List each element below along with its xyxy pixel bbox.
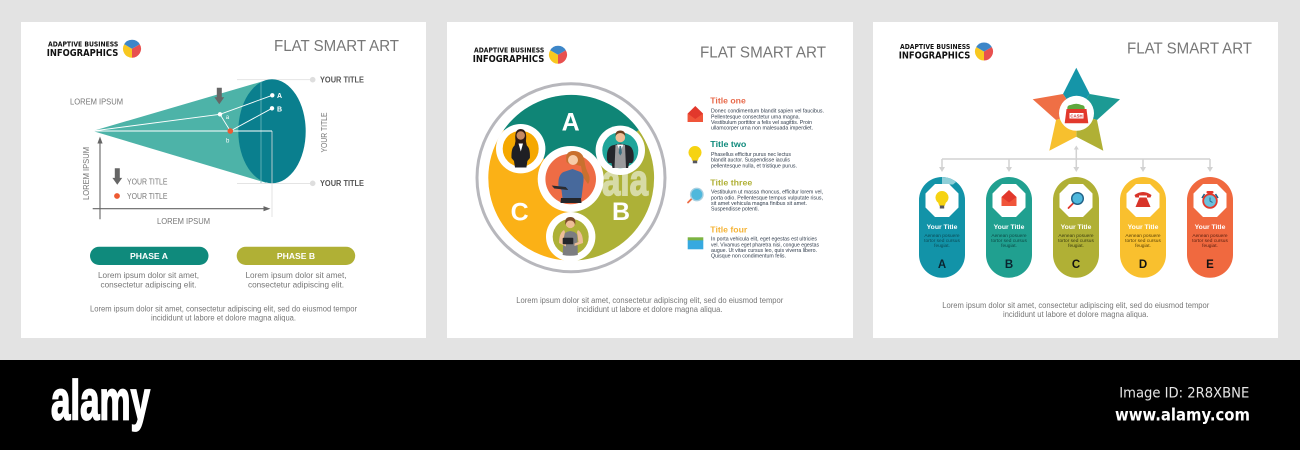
- website: www.alamy.com: [1115, 406, 1250, 425]
- icon: magnifier: [688, 188, 703, 202]
- legend: YOUR TITLE: [127, 191, 168, 201]
- phase B: [237, 247, 355, 289]
- icon: envelope: [1002, 190, 1016, 206]
- item: title three: porta odio. Pellentesque tempus vulputate risus,: [711, 195, 823, 201]
- panel: star hierarchy: [873, 22, 1278, 338]
- item: title two: [688, 139, 797, 169]
- person: bottom woman with tablet: [546, 212, 595, 261]
- footer text: incididunt ut labore et dolore magna aliqua.: [577, 305, 722, 314]
- card E: [1187, 177, 1233, 278]
- logo: INFOGRAPHICS: [899, 50, 970, 62]
- card B: tortor sed cursus: [991, 238, 1027, 244]
- card D: tortor sed cursus: [1125, 238, 1161, 244]
- item: title one: Pellentesque consectetur urna magna.: [711, 114, 800, 120]
- footer text: [942, 301, 1210, 319]
- item: title three: Suspendisse potenti.: [711, 206, 759, 212]
- item: title four: Title four: [710, 224, 748, 234]
- logo: [473, 46, 567, 65]
- circle chart: [477, 84, 665, 272]
- axis labels: YOUR TITLE: [319, 112, 329, 152]
- item: title one: ullamcorper urna non malesuada imperdiet.: [711, 125, 813, 131]
- heading: FLAT SMART ART: [700, 44, 826, 61]
- icon: alarm clock: [1202, 191, 1218, 208]
- logo: INFOGRAPHICS: [47, 48, 118, 59]
- side titles: [320, 75, 365, 188]
- item: title four: In porta vehicula elit, eget egestas est ultricies: [711, 237, 817, 243]
- item: title three: Vestibulum ut massa rhoncus, efficitur lorem vel,: [711, 190, 823, 196]
- icon: cash: CASH: [1070, 114, 1083, 118]
- logo: [47, 40, 141, 59]
- heading: FLAT SMART ART: [274, 38, 399, 55]
- footer text: Lorem ipsum dolor sit amet, consectetur adipiscing elit, sed do eiusmod tempor: [516, 296, 784, 305]
- card B: feugiat.: [1001, 243, 1017, 249]
- card A: [919, 177, 965, 278]
- phase B: PHASE B: [277, 251, 315, 261]
- item: title four: Quisque non condimentum felis.: [711, 254, 786, 260]
- footer text: incididunt ut labore et dolore magna aliqua.: [1003, 310, 1148, 319]
- phase B: consectetur adipiscing elit.: [248, 280, 344, 289]
- logo: ADAPTIVE BUSINESS: [48, 40, 118, 49]
- item: title one: Vestibulum porttitor a felis vel sagittis. Proin: [711, 120, 812, 126]
- circle chart: C: [511, 198, 529, 226]
- panel: circle diagram: [447, 22, 853, 338]
- item: title three: Title three: [710, 178, 753, 188]
- panel: cone chart: [21, 22, 426, 338]
- item: title four: augue. Ut vitae cursus leo, quis viverra libero.: [711, 248, 817, 254]
- image id: Image ID: 2R8XBNE: [1119, 385, 1249, 401]
- logo: INFOGRAPHICS: [473, 54, 544, 65]
- item: title four: [688, 224, 819, 260]
- phase B: Lorem ipsum dolor sit amet,: [245, 271, 347, 280]
- item: title two: Title two: [710, 139, 746, 149]
- legend: YOUR TITLE: [127, 176, 168, 186]
- card B: Your Title: [994, 224, 1025, 231]
- footer text: incididunt ut labore et dolore magna aliqua.: [151, 314, 296, 323]
- segment A: [504, 95, 639, 178]
- axis labels: LOREM IPSUM: [70, 97, 123, 107]
- footer text: [516, 296, 784, 314]
- card A: Aenean posuere: [924, 233, 960, 239]
- legend: [112, 168, 168, 201]
- card C: [1053, 177, 1099, 278]
- watermark ghost: ala: [602, 156, 648, 205]
- card E: feugiat.: [1202, 243, 1218, 249]
- side titles: YOUR TITLE: [320, 179, 365, 188]
- card B: B: [1005, 259, 1013, 271]
- side titles: YOUR TITLE: [320, 75, 365, 84]
- card A: Your Title: [927, 224, 958, 231]
- chart axes: [93, 136, 270, 219]
- person: woman in black suit: [496, 124, 545, 173]
- logo: ADAPTIVE BUSINESS: [474, 46, 544, 55]
- footer text: Lorem ipsum dolor sit amet, consectetur adipiscing elit, sed do eiusmod tempor: [90, 304, 357, 314]
- item: title three: sit amet vehicula magna finibus sit amet.: [711, 201, 807, 207]
- axis labels: [70, 97, 329, 226]
- card E: Aenean posuere: [1192, 233, 1228, 239]
- circle chart: A: [562, 108, 580, 136]
- card C: Aenean posuere: [1058, 233, 1094, 239]
- footer band: [0, 360, 1300, 450]
- card A: A: [938, 259, 946, 271]
- segment C: [488, 130, 571, 261]
- cone chart: B: [277, 106, 282, 114]
- logo: [899, 42, 993, 62]
- phase A: consectetur adipiscing elit.: [100, 280, 197, 289]
- item: title one: [688, 96, 824, 131]
- cone chart: [93, 79, 306, 217]
- card A: tortor sed cursus: [924, 238, 960, 244]
- icon: water: [688, 237, 703, 249]
- logo: ADAPTIVE BUSINESS: [900, 42, 970, 51]
- phase A: [90, 247, 208, 289]
- person: central woman: [538, 146, 604, 212]
- icon: telephone: [1134, 192, 1152, 207]
- card C: tortor sed cursus: [1058, 238, 1094, 244]
- heading: FLAT SMART ART: [1127, 40, 1252, 57]
- card C: feugiat.: [1068, 243, 1084, 249]
- phase A: Lorem ipsum dolor sit amet,: [98, 271, 199, 280]
- cone chart: b: [226, 138, 230, 144]
- card D: [1120, 177, 1166, 278]
- icon: envelope: [688, 106, 703, 122]
- axis labels: LOREM IPSUM: [157, 216, 210, 226]
- item: title two: pellentesque nulla, et tristique purus.: [711, 163, 797, 169]
- item: title four: vel. Vivamus eget pharetra nisi, congue egestas: [711, 242, 819, 248]
- segment B: [571, 130, 654, 261]
- item: title two: Phasellus efficitur purus nec lectus: [711, 152, 791, 158]
- item: title two: blandit auctor. Suspendisse iaculis: [711, 158, 790, 164]
- card C: Your Title: [1061, 224, 1092, 231]
- brand logo: alamy: [51, 368, 150, 432]
- card E: tortor sed cursus: [1192, 238, 1228, 244]
- card D: Aenean posuere: [1125, 233, 1161, 239]
- item: title one: Donec condimentum blandit sapien vel faucibus.: [711, 109, 824, 115]
- item: title three: [688, 178, 823, 212]
- item: title one: Title one: [710, 96, 746, 106]
- icon: light bulb: [935, 191, 949, 208]
- leader lines: [237, 77, 316, 186]
- card A: feugiat.: [934, 243, 950, 249]
- card B: Aenean posuere: [991, 233, 1027, 239]
- card B: [986, 177, 1032, 278]
- card E: Your Title: [1195, 224, 1226, 231]
- icon: light bulb: [688, 146, 702, 163]
- card D: D: [1139, 259, 1147, 271]
- footer text: Lorem ipsum dolor sit amet, consectetur adipiscing elit, sed do eiusmod tempor: [942, 301, 1210, 310]
- cone chart: A: [277, 93, 282, 100]
- card D: Your Title: [1128, 224, 1159, 231]
- card C: C: [1072, 259, 1080, 271]
- star: [1033, 68, 1120, 151]
- circle chart: B: [612, 198, 630, 226]
- icon: magnifier: [1068, 193, 1083, 208]
- connectors: [939, 146, 1213, 172]
- axis labels: LOREM IPSUM: [81, 147, 91, 200]
- footer text: [90, 304, 357, 323]
- card D: feugiat.: [1135, 243, 1151, 249]
- person: man in suit: [596, 126, 645, 175]
- phase A: PHASE A: [130, 251, 168, 261]
- card E: E: [1206, 259, 1214, 271]
- cone chart: a: [226, 115, 230, 121]
